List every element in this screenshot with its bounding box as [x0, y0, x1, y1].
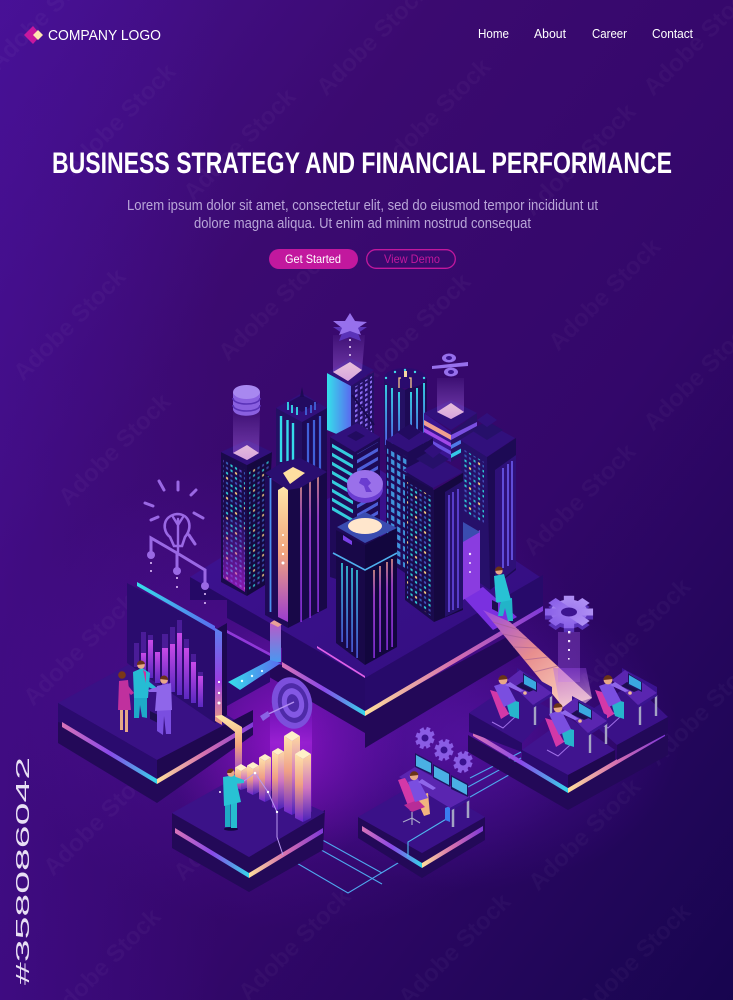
icon: percent	[432, 354, 468, 376]
platform: main city base	[190, 470, 543, 748]
bar chart panel	[127, 582, 227, 725]
light column under gear	[553, 632, 592, 714]
platform: monitoring	[358, 780, 485, 878]
watermark pattern: Adobe Stock	[8, 263, 132, 386]
navigation: About	[534, 26, 566, 41]
watermark pattern: Adobe Stock	[573, 573, 697, 696]
button: view demo: View Demo	[384, 252, 440, 266]
navigation	[478, 26, 693, 41]
workstation: trader with monitors	[398, 753, 470, 827]
figure: man walking with briefcase	[492, 566, 513, 621]
platform: business meeting	[58, 660, 253, 803]
icon: database	[233, 385, 260, 416]
icon: gear	[545, 596, 593, 660]
watermark pattern: Adobe Stock	[518, 438, 642, 561]
watermark pattern: Adobe Stock	[213, 243, 337, 366]
logo: COMPANY LOGO	[48, 27, 161, 44]
woman	[118, 671, 134, 732]
tower: front right dotted tower	[403, 444, 463, 622]
watermark pattern: Adobe Stock	[168, 763, 292, 886]
platform: target and growth chart	[172, 775, 325, 892]
watermark pattern: Adobe Stock	[353, 268, 477, 391]
icon: three gears	[412, 724, 476, 776]
watermark pattern: Adobe Stock	[38, 758, 162, 881]
bar chart: growth bars	[235, 731, 311, 822]
chart trend line	[219, 772, 283, 855]
watermark pattern: Adobe Stock	[58, 58, 182, 181]
platform: office desks	[468, 683, 668, 810]
tower: horizontal stripe tower	[330, 423, 380, 585]
watermark pattern: Adobe Stock	[543, 233, 667, 356]
subtitle text: Lorem ipsum dolor sit amet, consectetur elit, sed do eiusmod tempor incididunt ut	[127, 198, 598, 214]
watermark pattern: Adobe Stock	[178, 83, 302, 206]
watermark pattern: Adobe Stock	[518, 98, 642, 221]
navigation: Home	[478, 26, 509, 41]
workstation: desk three	[595, 668, 657, 728]
tower: right stepped tower	[460, 413, 516, 590]
light column behind target	[270, 705, 312, 812]
subtitle text	[127, 198, 598, 232]
door portal	[450, 522, 480, 600]
navigation: Contact	[652, 26, 693, 41]
stairs	[463, 587, 592, 707]
tower: gold band tower	[265, 458, 327, 628]
tower: front centre tower	[333, 512, 397, 665]
figure: man pointing at chart	[223, 769, 244, 831]
button: get started	[269, 249, 358, 269]
watermark pattern: Adobe Stock	[523, 773, 647, 896]
pipe: connection between panel and city	[228, 619, 284, 690]
icon: lightbulb	[145, 481, 209, 604]
man in purple suit	[148, 675, 172, 735]
watermark pattern: Adobe Stock	[373, 53, 497, 176]
icon: star	[333, 313, 367, 341]
briefcase	[150, 711, 160, 724]
workstation: desk one	[490, 668, 552, 728]
icon: key disc above tower	[347, 470, 383, 503]
tower: cyan stripe tower	[276, 387, 327, 485]
tower: dotted tower left with database	[221, 385, 272, 596]
pipe: gold link to chart	[215, 715, 242, 775]
stock id: #358086042	[13, 757, 33, 985]
watermark pattern: Adobe Stock	[53, 388, 177, 511]
workstation: desk two	[545, 696, 607, 756]
button: get started: Get Started	[285, 252, 341, 266]
subtitle text: dolore magna aliqua. Ut enim ad minim nostrud consequat	[194, 216, 531, 232]
watermark pattern: Adobe Stock	[18, 588, 142, 711]
circuit line on monitoring platform	[408, 818, 448, 857]
figures: business meeting	[118, 660, 172, 735]
circuit lines	[283, 752, 523, 893]
icon: target with arrow	[260, 673, 317, 733]
tower: percent tower	[424, 354, 477, 462]
tower: crown tower	[384, 368, 427, 450]
button: view demo	[367, 250, 455, 268]
navigation: Career	[592, 26, 628, 41]
man with tie	[133, 660, 157, 718]
tower: blue grid tower	[386, 424, 433, 575]
tower: star tower	[327, 313, 374, 440]
